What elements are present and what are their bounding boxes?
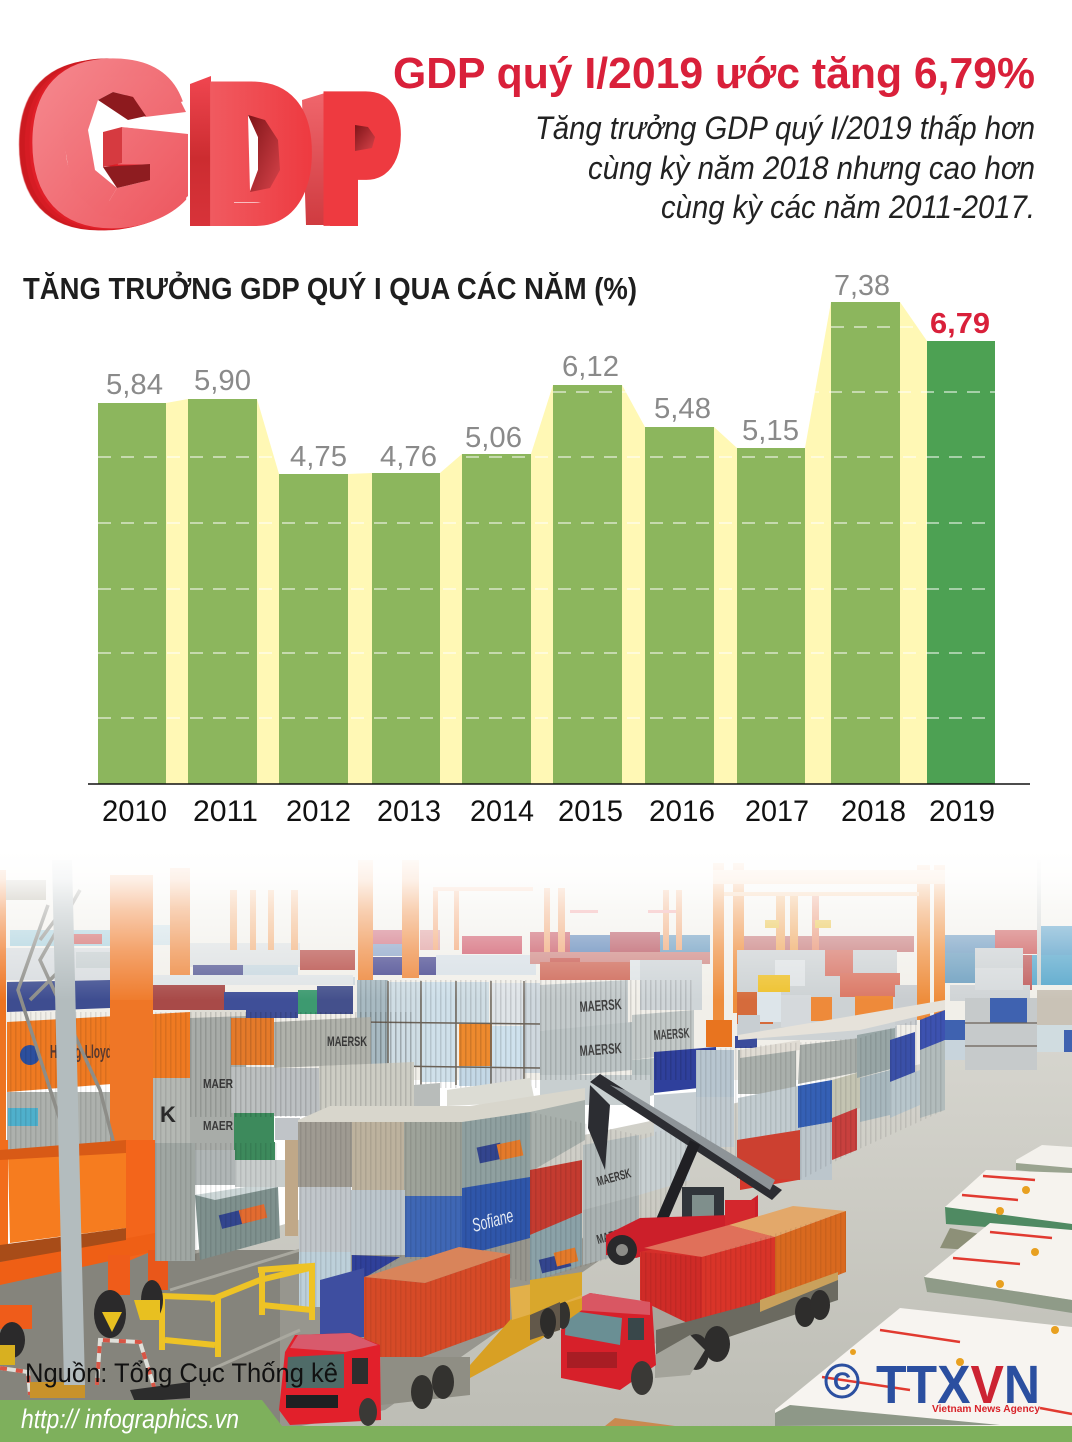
- gantry crane lower body: [0, 1140, 168, 1329]
- bar chart: GDP growth by year: [88, 270, 1030, 828]
- logo: TTXVN: Vietnam News Agency: [932, 1403, 1040, 1415]
- MAERSK containers, centre: MAERSK: [579, 1040, 622, 1060]
- year axis labels: 2010: [102, 795, 167, 828]
- year axis labels: [102, 795, 995, 828]
- right-hand far stacks: [706, 950, 1072, 1070]
- crane wheels and hazard marks: [0, 1280, 190, 1402]
- year axis labels: 2018: [841, 795, 906, 828]
- red truck cab: [561, 1293, 656, 1395]
- stacks beside gantry: [155, 1140, 298, 1261]
- central stacks with blue and red boxes: [696, 1000, 945, 1190]
- gray lamp pole: [52, 860, 85, 1385]
- title: GDP quý I/2019 ước tăng 6,79%: [393, 49, 1035, 98]
- yellow spreader frame: [162, 1266, 312, 1357]
- logo letter D: D: [199, 37, 319, 271]
- subtitle text block: cùng kỳ năm 2018 nhưng cao hơn: [588, 150, 1035, 186]
- Hapag-Lloyd orange container and gantry: [0, 870, 190, 1240]
- chart heading: TĂNG TRƯỞNG GDP QUÝ I QUA CÁC NĂM (%): [23, 270, 637, 306]
- ship deck containers at bottom right: [605, 1145, 1072, 1426]
- front tall stack: Sofiane: [470, 1206, 516, 1237]
- truck at right with red and orange containers: [561, 1206, 846, 1395]
- far container bands, left: [7, 975, 353, 1018]
- subtitle text block: Tăng trưởng GDP quý I/2019 thấp hơn: [535, 110, 1035, 146]
- bar value labels: 5,84: [106, 369, 163, 401]
- year axis labels: 2011: [193, 795, 258, 828]
- bar value labels: 7,38: [834, 270, 890, 302]
- bar value labels: [106, 270, 990, 473]
- MAERSK containers, centre: MAERSK: [579, 996, 622, 1016]
- front tall stack: MAERSK: [595, 1223, 633, 1247]
- source note: Nguồn: Tổng Cục Thống kê: [25, 1358, 338, 1388]
- mid left stacks: MAERSK: [327, 1033, 367, 1049]
- mid left stacks: MAER: [203, 1118, 233, 1133]
- mid left stacks: [190, 1010, 535, 1155]
- year axis labels: 2017: [745, 795, 809, 828]
- year axis labels: 2013: [377, 795, 441, 828]
- MAERSK containers, centre: [540, 980, 716, 1140]
- front tall stack: [298, 1088, 800, 1307]
- bar value labels: 5,90: [194, 365, 251, 397]
- connecting yellow bands: [166, 302, 927, 784]
- truck at left with orange-red container: [279, 1247, 582, 1426]
- far container rows: [0, 925, 1072, 1010]
- copyright mark: [826, 1365, 858, 1397]
- road surface: [0, 1045, 1072, 1430]
- copyright mark: C: [833, 1368, 851, 1396]
- footer bar with website tab: http:// infographics.vn: [21, 1404, 239, 1434]
- red truck cab: [279, 1333, 381, 1426]
- bars: [98, 302, 995, 784]
- yellow trailer at left of road: [530, 1272, 582, 1340]
- bar value labels: 4,75: [290, 441, 347, 473]
- bar value labels: 6,12: [562, 351, 619, 383]
- logo letter P: P: [316, 52, 404, 265]
- Hapag-Lloyd orange container and gantry: K: [160, 1102, 176, 1127]
- footer bar with website tab: [0, 1400, 1072, 1442]
- year axis labels: 2016: [649, 795, 715, 828]
- Hapag-Lloyd orange container and gantry: Hapag-Lloyd: [50, 1042, 112, 1062]
- logo letter G: G: [23, 9, 200, 277]
- front tall stack: MAERSK: [595, 1165, 633, 1189]
- year axis labels: 2012: [286, 795, 351, 828]
- subtitle text block: [535, 110, 1035, 225]
- reach stacker: [588, 1074, 782, 1265]
- year axis labels: 2015: [558, 795, 623, 828]
- white haze at top of photo: [0, 850, 1072, 1000]
- bar value labels: 5,15: [742, 415, 799, 447]
- illustration: container port scene: [0, 850, 1072, 1430]
- stacks at far right: [945, 990, 1072, 1070]
- subtitle text block: cùng kỳ các năm 2011-2017.: [661, 189, 1035, 225]
- bar value labels: 6,79: [930, 308, 990, 340]
- year axis labels: 2014: [470, 795, 534, 828]
- logo: 3D GDP letters: [23, 9, 404, 277]
- gantry cranes: [0, 860, 1041, 1165]
- bar value labels: 5,48: [654, 393, 711, 425]
- bar value labels: 5,06: [465, 422, 522, 454]
- logo: TTXVN: TTXVN: [876, 1355, 1040, 1415]
- pale blue container stack: [357, 980, 540, 1088]
- mid left stacks: MAER: [203, 1076, 233, 1091]
- bar value labels: 4,76: [380, 441, 437, 473]
- MAERSK containers, centre: MAERSK: [653, 1025, 690, 1043]
- year axis labels: 2019: [929, 795, 995, 828]
